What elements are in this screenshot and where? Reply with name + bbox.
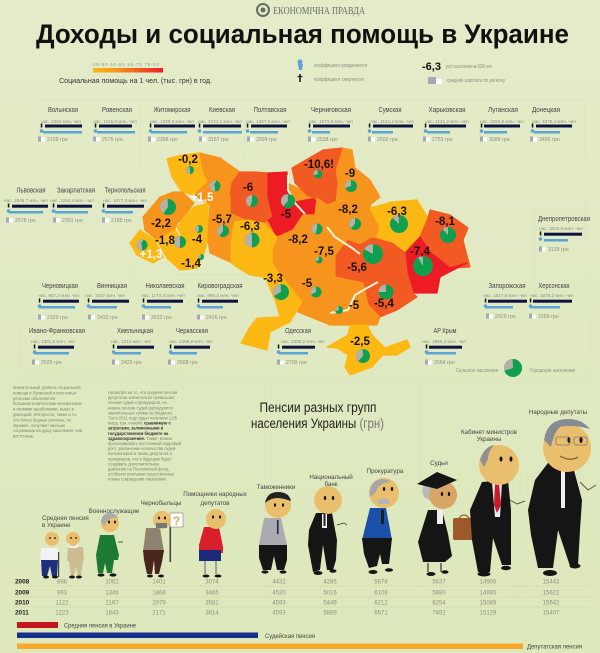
region info: Хмельницкая: [111, 326, 154, 366]
text block: right note: давление на Пенсионный фонд,: [108, 466, 169, 472]
character labels: банк: [325, 481, 338, 488]
pensions table: 6254: [432, 600, 446, 606]
region info: Херсонская: Херсонская: [538, 281, 570, 290]
map value labels: [140, 154, 456, 348]
text block: right note: прогнозировать постоянный кадровый: [108, 441, 181, 446]
region info: Винницкая: 2432 грн: [97, 315, 118, 321]
pensions table: 2008: [15, 578, 30, 586]
region info: Черниговская: 2538 грн: [317, 137, 338, 143]
character labels: Чернобыльцы: [141, 500, 182, 507]
region info: Одесская: нас. 2385,2 млн. чел: [281, 339, 325, 344]
map value labels: -0,2: [178, 154, 198, 166]
text block: right note: [108, 390, 181, 482]
bar: deputy pension: [17, 644, 582, 650]
text block: right note: особенно учитывая существенные: [108, 472, 175, 477]
text block: left note: и низкими заработками, выше в: [13, 407, 74, 412]
character labels: в Украине: [42, 522, 71, 529]
pensions table: 1062: [105, 580, 119, 586]
pensions table: 14985: [480, 590, 497, 596]
region info: Запорожская: нас. 1817,8 млн. чел: [483, 293, 527, 298]
region info: АР Крым: нас. 1965,2 млн. чел: [422, 339, 466, 344]
character labels: Прокуратура: [367, 468, 404, 475]
title: Доходы и социальная помощь в Украине: [36, 19, 569, 49]
heading: pensions: Пенсии разных групп: [260, 400, 376, 415]
region info: Луганская: 3086 грн: [489, 137, 510, 143]
region info: АР Крым: АР Крым: [434, 326, 457, 335]
figure: average pensioners: [40, 532, 84, 578]
region info: Сумская: 2502 грн: [377, 137, 398, 143]
character labels: Национальный: [309, 474, 353, 481]
pensions table: 1346: [105, 590, 119, 596]
text block: left note: Значительный уровень социальной: [13, 385, 81, 390]
pensions table: 15542: [543, 600, 560, 606]
map value labels: -5: [302, 278, 313, 290]
pensions table: 6108: [374, 590, 388, 596]
region info: Ивано-Франковская: 2529 грн: [41, 360, 62, 366]
pensions table: 2171: [152, 610, 166, 616]
map value labels: +1,3: [140, 249, 162, 261]
pensions table: 4432: [272, 580, 286, 586]
pensions table: [14, 578, 590, 616]
region info: Киевская: [198, 105, 242, 143]
region info: Ивано-Франковская: нас. 1381,8 млн. чел: [31, 339, 75, 344]
text block: right note: депутатов значительно превышает: [108, 395, 175, 400]
region info: Одесская: 2709 грн: [286, 360, 307, 366]
region info: Черниговская: [308, 105, 353, 143]
character labels: [42, 409, 588, 529]
pensions table: 1868: [152, 590, 166, 596]
region info: Львовская: 2578 грн: [15, 218, 36, 224]
region info: Донецкая: нас. 4375,4 млн. чел: [532, 119, 576, 124]
map of Ukraine: [130, 148, 470, 375]
bar: deputy pension: Депутатская пенсия: [527, 644, 582, 650]
pensions table: 3465: [205, 590, 219, 596]
legend: population growth and salary: средняя зарплата по региону: [447, 78, 505, 84]
text block: left note: большим количеством пенсионеров: [13, 401, 82, 406]
map value labels: -1,8: [155, 235, 176, 247]
region info: Закарпатская: [50, 186, 95, 224]
text block: right note: государственном бюджете на: [108, 431, 169, 436]
character labels: депутатов: [200, 500, 230, 507]
pensions table: 2010: [15, 600, 30, 606]
region info: Николаевская: нас. 1173,3 млн. чел: [141, 293, 185, 298]
map value labels: -7,4: [410, 246, 431, 258]
pensions table: 14905: [480, 580, 497, 586]
region info: Полтавская: Полтавская: [254, 105, 287, 114]
region info: Волынская: нас. 1040 млн. чел: [41, 119, 81, 124]
pensions table: 5678: [374, 580, 388, 586]
region info: Сумская: нас. 1141,2 млн. чел: [370, 119, 414, 124]
pensions table: 6212: [374, 600, 388, 606]
legend: birth and death rate: коэффициент рождаемости: [314, 63, 367, 69]
region info: Харьковская: 2755 грн: [432, 137, 453, 143]
pensions table: 4285: [323, 580, 337, 586]
region info: Черкасская: Черкасская: [176, 326, 208, 335]
region info: Житомирская: 2398 грн: [157, 137, 178, 143]
character labels: Военнослужащие: [89, 508, 140, 515]
character labels: Средняя пенсия: [42, 515, 89, 522]
text block: right note: низкие пенсии судей расходуются: [108, 405, 173, 410]
map value labels: -5,6: [347, 262, 367, 274]
region info: Тернопольская: нас. 1077,3 млн. чел: [103, 198, 147, 203]
region info: Тернопольская: [102, 186, 147, 224]
pensions table: 15089: [480, 600, 497, 606]
text block: right note: рост, увеличение количества судей-: [108, 446, 177, 451]
map value labels: -8,2: [288, 234, 308, 246]
text block: right note: Несмотря на то, что средняя пенсия: [108, 390, 177, 395]
text block: left note: регионах объясняется: [13, 396, 55, 401]
region info: Запорожская: [483, 281, 527, 320]
legend: population growth and salary: [422, 61, 505, 84]
legend: population growth and salary: -6,3: [422, 61, 441, 73]
region info: Львовская: [4, 186, 48, 224]
region info: Черниговская: нас. 1073,9 млн. чел: [309, 119, 353, 124]
figure: judge with briefcase: [417, 472, 476, 576]
region info: Житомирская: [148, 105, 195, 143]
region info: Черкасская: нас. 1268,9 млн. чел: [169, 339, 213, 344]
figure: people's deputies: [528, 419, 596, 576]
region info: Киевская: нас. 1721,1 млн. чел: [198, 119, 242, 124]
legend: social aid scale: Социальная помощь на 1 чел. (тыс. грн) в год.: [59, 76, 212, 85]
text block: left note: помощи в Луганской и восточных: [13, 390, 76, 395]
region info: Волынская: [38, 105, 82, 143]
pensions table: 2009: [15, 590, 30, 596]
region info: Харьковская: Харьковская: [428, 105, 466, 114]
river Dnipro: [288, 175, 378, 313]
region info: Одесская: [277, 326, 325, 366]
pensions table: 1122: [56, 600, 69, 606]
text block: left note: соцпомощи на душу населения, чем: [13, 428, 83, 433]
region info: АР Крым: [422, 326, 466, 366]
figure: prosecutor: [362, 478, 399, 574]
text block: right note: пенсии судей и прокуроров, на: [108, 400, 167, 405]
map value labels: -7,5: [314, 246, 335, 258]
region info: Кировоградская: Кировоградская: [198, 281, 243, 290]
region info: Донецкая: [530, 105, 576, 143]
region info: АР Крым: 2664 грн: [434, 360, 455, 366]
map value labels: -8,2: [338, 204, 358, 216]
character labels: Кабинет министров: [461, 429, 518, 436]
text block: right note: пенсионеров и также депутатов и: [108, 451, 172, 456]
pensions table: 2079: [152, 600, 166, 606]
map value labels: -5,4: [374, 298, 395, 310]
region info: Кировоградская: [197, 281, 243, 321]
region info: Полтавская: нас. 1467,9 млн. чел: [246, 119, 290, 124]
region info: Черкасская: 2508 грн: [177, 360, 198, 366]
region info: Харьковская: [423, 105, 469, 143]
figure: customs: [259, 492, 291, 574]
region info: Ровенская: Ровенская: [102, 105, 132, 114]
character labels: Таможенники: [257, 484, 296, 491]
region info: Луганская: нас. 2256,5 млн. чел: [480, 119, 524, 124]
region info: Херсонская: нас. 1079,2 млн. чел: [530, 293, 574, 298]
map value labels: -3,3: [263, 273, 283, 285]
map value labels: -2,2: [151, 218, 171, 230]
region info: Днепропетровская: 3139 грн: [548, 247, 569, 253]
text block: left note: [13, 385, 83, 439]
region info: Хмельницкая: Хмельницкая: [117, 326, 153, 335]
region info: Тернопольская: Тернопольская: [104, 186, 146, 194]
region info: Ровенская: нас. 1156,9 млн. чел: [93, 119, 137, 124]
pensions table: 15443: [543, 580, 560, 586]
text block: left note: Донецкой. Интересно, также и то,: [13, 412, 77, 417]
map value labels: -5: [281, 209, 292, 221]
region info: Полтавская: [246, 105, 290, 143]
pie legend: Сельское население: [456, 368, 498, 374]
map value labels: -2,5: [350, 336, 371, 348]
text block: left note: что более бедные регионы, по: [13, 417, 72, 422]
pensions table: 5889: [323, 610, 337, 616]
figure: military: [96, 513, 123, 577]
pensions table: 4593: [272, 610, 286, 616]
region info: Киевская: Киевская: [209, 105, 235, 114]
map value labels: -6,3: [240, 221, 260, 233]
region info: Черновицкая: 2329 грн: [47, 315, 68, 321]
pensions table: 2011: [15, 610, 29, 616]
region info: Тернопольская: 2185 грн: [111, 218, 132, 224]
region info: Кировоградская: нас. 995,2 млн. чел: [197, 293, 239, 298]
bar: average pension: Средняя пенсия в Украине: [64, 622, 136, 630]
region info: Закарпатская: нас. 1254,4 млн. чел: [50, 198, 94, 203]
figure: Chernobyl veteran with sign: [143, 511, 183, 578]
region info: Винницкая: [85, 281, 129, 321]
region info: Ивано-Франковская: Ивано-Франковская: [29, 326, 85, 335]
region info: Луганская: [480, 105, 524, 143]
text block: right note: создавать дополнительное: [108, 461, 160, 466]
pensions table: 5016: [323, 590, 337, 596]
map value labels: -8,1: [435, 216, 456, 228]
pensions table: 898: [57, 580, 68, 586]
pensions table: 15622: [543, 590, 560, 596]
region info: Черновицкая: [38, 281, 80, 321]
region info: Полтавская: 2899 грн: [256, 137, 277, 143]
region info: Днепропетровская: нас. 3322,5 млн. чел: [539, 226, 583, 231]
map value labels: -9: [345, 168, 355, 180]
region info: Хмельницкая: 2425 грн: [121, 360, 142, 366]
region info: Житомирская: Житомирская: [154, 105, 191, 114]
figure: cabinet of ministers: [470, 445, 525, 576]
region info: Сумская: [368, 105, 414, 143]
pensions table: 4530: [272, 590, 286, 596]
pensions table: 1843: [105, 610, 119, 616]
character labels: Украины: [477, 436, 502, 443]
map value labels: +1,5: [191, 192, 214, 204]
character labels: Помощники народных: [183, 491, 248, 498]
region info: Херсонская: [529, 281, 574, 320]
text block: right note: здравоохранение. Также, можно: [108, 436, 173, 441]
region info: Николаевская: [141, 281, 185, 321]
region info: Винницкая: нас. 1627 млн. чел: [85, 293, 125, 298]
pie legend: [456, 359, 575, 377]
region info: Львовская: нас. 2546,7 млн. чел: [4, 198, 48, 203]
region info: Закарпатская: 2351 грн: [62, 218, 83, 224]
pensions table: 3581: [205, 600, 219, 606]
logo: Ekonomichna Pravda: ЕКОНОМІЧНА ПРАВДА: [273, 6, 366, 17]
pensions table: 3074: [205, 580, 219, 586]
legend: social aid scale: [59, 62, 212, 85]
logo: Ekonomichna Pravda: [257, 4, 366, 17]
pensions table: 1401: [152, 580, 166, 586]
legend: birth and death rate: коэффициент смертности: [314, 77, 364, 83]
character labels: Народные депутаты: [529, 409, 588, 416]
text block: right note: млрд. грн. пенсий, сравнимую с: [108, 421, 171, 426]
region info: Ивано-Франковская: [29, 326, 85, 366]
map value labels: -5: [349, 300, 360, 312]
region info: Николаевская: 2622 грн: [151, 315, 172, 321]
region info: Днепропетровская: [538, 214, 590, 253]
pensions table: 15129: [480, 610, 497, 616]
region info: Черновицкая: Черновицкая: [42, 281, 78, 290]
pie legend: Городское население: [530, 368, 575, 374]
pensions table: 2167: [105, 600, 119, 606]
region info: Кировоградская: 2426 грн: [206, 315, 227, 321]
region info: Львовская: Львовская: [16, 186, 46, 194]
text block: right note: затратами, заложенными в: [108, 426, 164, 431]
map value labels: -4: [192, 234, 203, 246]
text block: left note: восточные.: [13, 434, 34, 439]
legend: birth and death rate: [298, 60, 367, 83]
region info: Одесская: Одесская: [285, 326, 311, 335]
figure: national bank: [308, 486, 347, 575]
legend: population growth and salary: рост населения на 1000 чел: [446, 64, 492, 70]
pensions table: 5449: [323, 600, 337, 606]
region info: Волынская: 2159 грн: [47, 137, 68, 143]
heading: pensions: населения Украины (грн): [251, 416, 384, 431]
region info: Харьковская: нас. 1141,2 млн. чел: [425, 119, 469, 124]
pensions table: 1223: [55, 610, 69, 616]
pensions table: 6571: [374, 610, 388, 616]
pensions table: 4593: [272, 600, 286, 606]
heading: pensions: [251, 400, 384, 431]
text block: right note: прокуроров, что в будущем будет: [108, 456, 172, 461]
region info: Житомирская: нас. 1268,9 млн. чел: [150, 119, 194, 124]
region info: Хмельницкая: нас. 1314 млн. чел: [111, 339, 151, 344]
legend: social aid scale: 48-50 50-55 55-75 75-82: [93, 62, 159, 67]
bar: judge pension: Судейская пенсия: [265, 632, 315, 640]
region info: Луганская: Луганская: [488, 105, 518, 114]
region info: Ровенская: [93, 105, 137, 143]
map value labels: -1,4: [181, 258, 202, 270]
text block: right note: планы сокращения населения.: [108, 477, 167, 482]
region info: Николаевская: Николаевская: [146, 281, 185, 290]
pensions table: 5880: [432, 590, 446, 596]
region info: Днепропетровская: Днепропетровская: [538, 214, 590, 223]
pensions table: 3614: [205, 610, 219, 616]
region info: Черновицкая: нас. 907,2 млн. чел: [38, 293, 80, 298]
pensions table: 5637: [432, 580, 446, 586]
region info: Винницкая: Винницкая: [97, 281, 127, 290]
map value labels: -6: [243, 182, 253, 194]
pie charts: [136, 166, 456, 363]
region info: Сумская: Сумская: [378, 105, 402, 114]
map value labels: -5,7: [212, 214, 232, 226]
region info: Волынская: Волынская: [48, 105, 78, 114]
text block: left note: Украине, получают меньше: [13, 423, 66, 428]
region info: Черниговская: Черниговская: [311, 105, 351, 114]
character labels: Судьи: [430, 460, 448, 467]
region info: Закарпатская: Закарпатская: [57, 186, 95, 194]
map value labels: -6,3: [387, 206, 407, 218]
region info: Запорожская: 2929 грн: [495, 314, 516, 320]
region info: Киевская: 3157 грн: [208, 137, 229, 143]
bar: average pension: [17, 622, 136, 630]
region info: Ровенская: 2575 грн: [102, 137, 123, 143]
figure: deputy assistants: [199, 509, 226, 578]
text block: right note: Так в 2011 году судьи получили 1,05: [108, 416, 178, 420]
region info: Херсонская: 2269 грн: [538, 314, 559, 320]
region info: Запорожская: Запорожская: [488, 281, 526, 290]
pensions table: 15407: [543, 610, 560, 616]
region info: Донецкая: 3456 грн: [539, 137, 560, 143]
region info: Донецкая: Донецкая: [532, 105, 560, 114]
map value labels: -10,6!: [304, 159, 334, 171]
region info: Черкасская: [168, 326, 213, 366]
text block: right note: значительные суммы из бюджета.: [108, 410, 173, 415]
figure: Chernobyl veteran with sign: ?: [173, 514, 180, 528]
bar: judge pension: [17, 632, 315, 640]
pensions table: 993: [57, 590, 68, 596]
pensions table: 7492: [432, 610, 446, 616]
